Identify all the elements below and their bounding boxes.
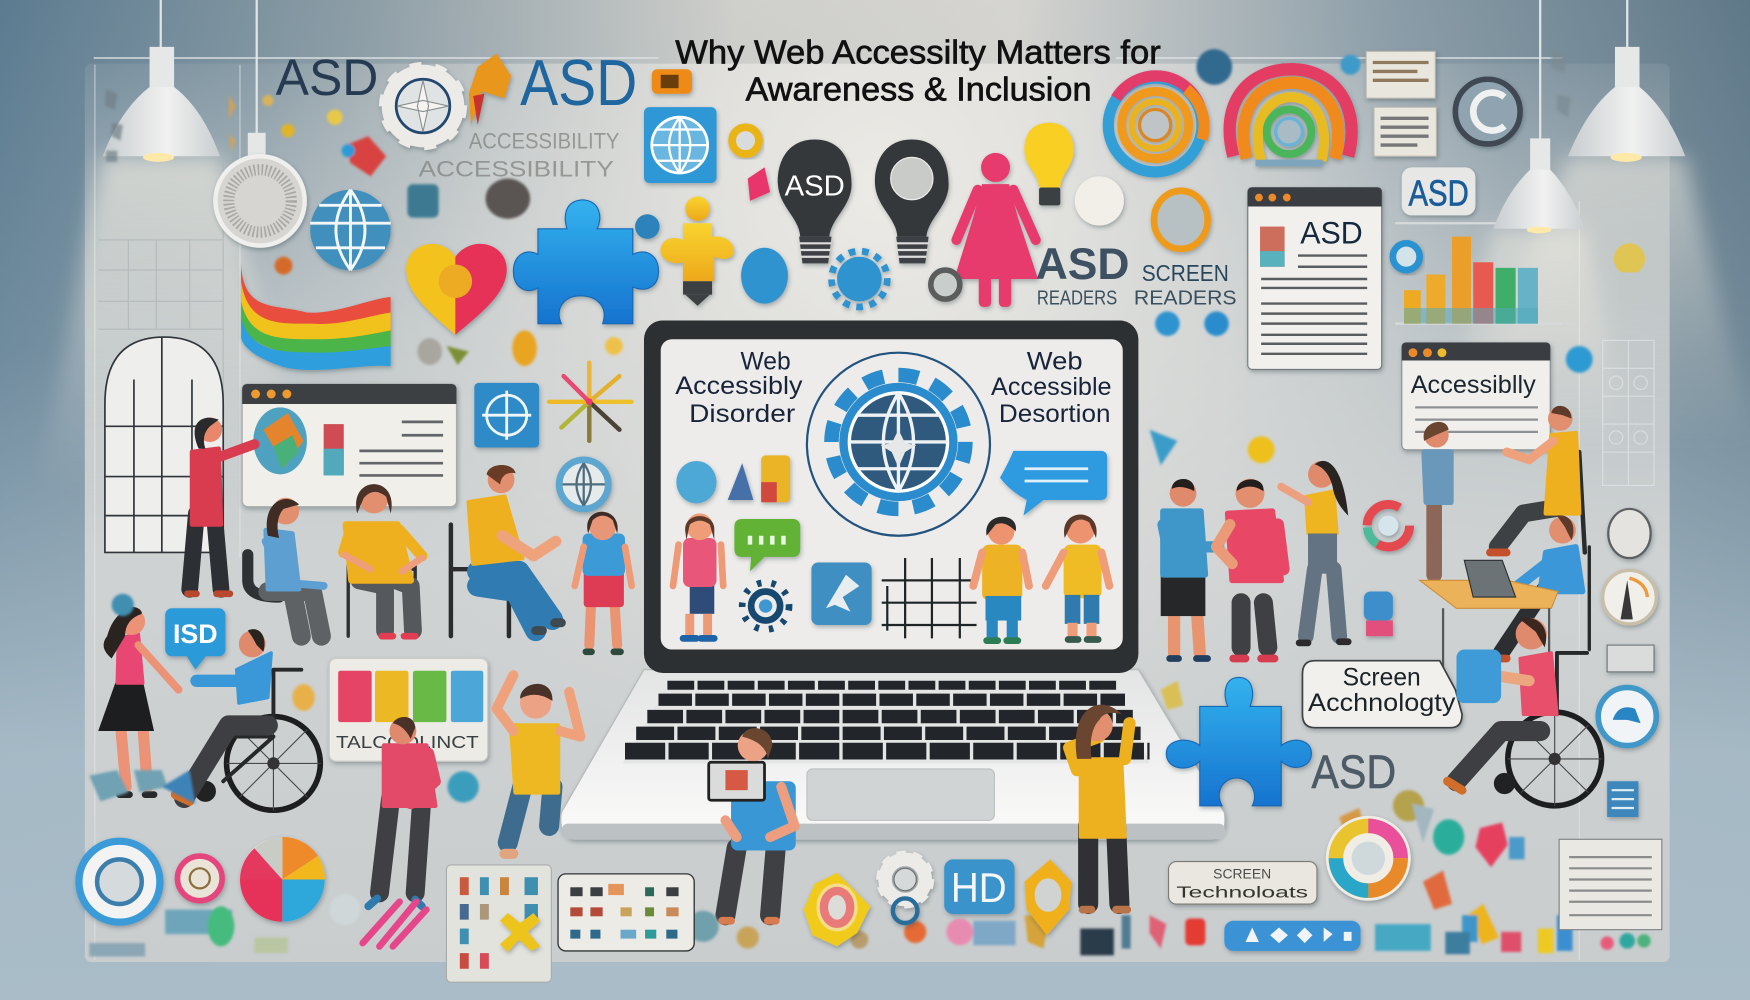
screen text right: Accessible bbox=[991, 374, 1112, 401]
icon: starburst bbox=[549, 363, 632, 441]
card: screen technologies: SCREEN bbox=[1213, 866, 1271, 881]
icon: yellow X bbox=[500, 913, 540, 952]
icon: rainbow spiral circle bbox=[1108, 76, 1204, 172]
lamp: left bbox=[103, 0, 220, 162]
person: man red shirt standing bbox=[368, 717, 435, 906]
text: ASD grey lower right: ASD bbox=[1311, 746, 1396, 798]
speech card: screen technology bbox=[1302, 661, 1462, 728]
icon: faint yellow bulb right bbox=[1614, 243, 1645, 304]
tile icon blue bbox=[811, 562, 872, 625]
text: ASD readers cluster bbox=[1036, 240, 1237, 310]
text: ASD readers cluster: SCREEN bbox=[1142, 260, 1229, 286]
person: woman red top presenting bbox=[188, 417, 254, 594]
ghost text: accessibility: ACCESSIBILITY bbox=[469, 128, 620, 153]
faint wall grid right panel bbox=[1603, 340, 1654, 485]
screen icons bbox=[676, 455, 790, 503]
icon: globe gear bbox=[556, 456, 612, 512]
screen text left: Accessibly bbox=[675, 373, 803, 400]
icon: heart two tone bbox=[406, 244, 507, 335]
heading: ASD blue: ASD bbox=[520, 46, 637, 119]
icon: yellow bulb bbox=[1024, 123, 1074, 205]
icon: rainbow arch bbox=[1230, 69, 1352, 163]
donut chart bbox=[1327, 817, 1410, 900]
ghost text: accessibility bbox=[419, 128, 620, 181]
heading: ASD dark: ASD bbox=[276, 49, 378, 106]
icon: pink swirl badge bbox=[177, 856, 222, 901]
screen text left bbox=[675, 348, 803, 428]
person: woman pink top black skirt bbox=[98, 607, 179, 795]
person: man blue at desk laptop bbox=[1493, 515, 1589, 658]
bar chart bbox=[1395, 223, 1562, 324]
blue pill with arrows bbox=[1224, 921, 1360, 951]
child yellow shirt B bbox=[1046, 515, 1109, 640]
arched window bbox=[105, 337, 223, 552]
person: man in wheelchair left bbox=[175, 629, 320, 810]
icon: blue stacked jar bbox=[1364, 592, 1393, 636]
speech bubble blue bbox=[1000, 451, 1107, 516]
badge: HD: HD bbox=[951, 865, 1007, 911]
screen text left: Web bbox=[741, 348, 791, 375]
screen text right bbox=[991, 348, 1112, 428]
icon: pink woman bbox=[954, 153, 1038, 307]
icon: pink sticks bbox=[363, 902, 426, 946]
card: screen technologies: Technoloats bbox=[1176, 884, 1308, 901]
screen text right: Web bbox=[1027, 348, 1083, 375]
text: ASD readers cluster: ASD bbox=[1036, 240, 1129, 289]
icon: copyright ring bbox=[1455, 79, 1520, 144]
document card bottom right bbox=[1559, 839, 1662, 930]
card: accessibility bbox=[1402, 343, 1550, 450]
lamp: right small bbox=[1493, 0, 1585, 233]
icon: orange camera badge bbox=[652, 69, 692, 94]
title: Awareness & Inclusion bbox=[746, 71, 1092, 108]
icon: blue puzzle piece bottom bbox=[1166, 677, 1311, 806]
icon: blue sticker cluster bbox=[635, 167, 960, 307]
document card ASD: ASD bbox=[1300, 215, 1363, 250]
icon: red and orange badge bbox=[469, 54, 511, 125]
card: colour swatches bbox=[329, 658, 488, 761]
trackpad bbox=[807, 769, 994, 820]
speech bubble ISD bbox=[165, 608, 225, 670]
lamp: right large bbox=[1568, 0, 1685, 162]
gear icon with ring bbox=[384, 67, 462, 145]
icon: yellow puzzle person bbox=[660, 196, 734, 306]
pie chart bbox=[240, 837, 325, 922]
person: seated woman yellow bbox=[344, 484, 422, 636]
title: Why Web Accessilty Matters for bbox=[675, 35, 1161, 72]
card: icon grid A bbox=[446, 865, 551, 982]
person: man yellow on chair bbox=[1490, 406, 1585, 552]
person: man yellow shirt arms up bbox=[497, 675, 580, 854]
child pink shirt bbox=[673, 513, 723, 638]
icon: colour ring bbox=[1367, 504, 1410, 547]
light cones bbox=[39, 156, 1750, 491]
desk and laptop bbox=[1420, 560, 1558, 670]
speech card: screen technology: Screen bbox=[1343, 664, 1421, 691]
person: man in wheelchair right bbox=[1448, 618, 1602, 806]
grid lines bbox=[882, 558, 977, 638]
icon: bulb with ASD: ASD bbox=[785, 170, 845, 202]
globe gear emblem bbox=[807, 353, 990, 536]
ghost text: accessibility: ACCESSIBILITY bbox=[419, 156, 614, 181]
person: man blue shirt bbox=[1161, 479, 1219, 658]
speech card: screen technology: Acchnologty bbox=[1308, 690, 1456, 717]
text: ASD readers cluster: READERS bbox=[1134, 288, 1237, 310]
icon: white blob bbox=[1075, 176, 1124, 225]
small scatter icons lower area bbox=[89, 594, 1651, 956]
title bbox=[675, 35, 1161, 108]
icon: dark bulb bbox=[875, 140, 949, 263]
laptop screen bbox=[661, 339, 1123, 650]
card: accessibility: Accessiblly bbox=[1411, 372, 1536, 399]
icon: orange ring bbox=[1154, 191, 1208, 249]
child yellow shirt A bbox=[973, 517, 1029, 641]
person: seated man yellow bbox=[451, 465, 561, 636]
person: girl blue shirt red skirt bbox=[575, 512, 632, 652]
keyboard bbox=[623, 681, 1150, 763]
document card ASD bbox=[1248, 188, 1382, 369]
laptop bbox=[561, 320, 1225, 839]
icon: rainbow flag bbox=[241, 263, 391, 370]
icon: white gear bbox=[879, 854, 931, 923]
icon: ring bottom left bbox=[80, 843, 158, 921]
card: colour swatches: TALCOOLINCT bbox=[336, 732, 479, 752]
screen text right: Desortion bbox=[999, 401, 1110, 428]
person: woman at card bbox=[1424, 422, 1451, 575]
person: woman yellow top bbox=[1281, 461, 1348, 643]
icon: yellow ring bbox=[732, 127, 759, 154]
faint wall grid left bbox=[98, 156, 223, 558]
icon: yellow gear badge bbox=[804, 873, 871, 946]
person: seated man with tablet bbox=[709, 728, 796, 921]
icon: globe bbox=[310, 190, 391, 270]
card: screen technologies bbox=[1169, 862, 1317, 904]
person: seated woman blue bbox=[248, 498, 324, 636]
icon: globe tile bbox=[644, 107, 717, 183]
right side round icons bbox=[1598, 509, 1656, 817]
card: icon grid B bbox=[558, 874, 694, 951]
icon: blue puzzle piece top bbox=[513, 200, 658, 324]
small scatter icons upper area bbox=[105, 45, 1593, 465]
gear icon navy bbox=[742, 583, 789, 629]
person: woman yellow shirt phone bbox=[1069, 705, 1129, 910]
small cards top right bbox=[1366, 51, 1436, 156]
icon: bulb with ASD bbox=[778, 140, 852, 263]
icon: target tile bbox=[474, 383, 539, 448]
screen text left: Disorder bbox=[689, 401, 795, 428]
badge: ASD: ASD bbox=[1408, 173, 1469, 213]
speech bubble ISD: ISD bbox=[173, 619, 218, 649]
speech bubble green bbox=[734, 519, 800, 571]
person: man red shirt bbox=[1217, 479, 1283, 658]
lamp: mesh fan bbox=[215, 0, 305, 246]
icon: yellow ring pointed bbox=[1025, 859, 1071, 935]
icon: blue ring badge bbox=[1393, 243, 1420, 270]
laptop bezel bbox=[644, 320, 1138, 673]
text: ASD readers cluster: READERS bbox=[1037, 288, 1117, 310]
browser window left bbox=[242, 384, 456, 507]
laptop base bbox=[561, 670, 1225, 839]
